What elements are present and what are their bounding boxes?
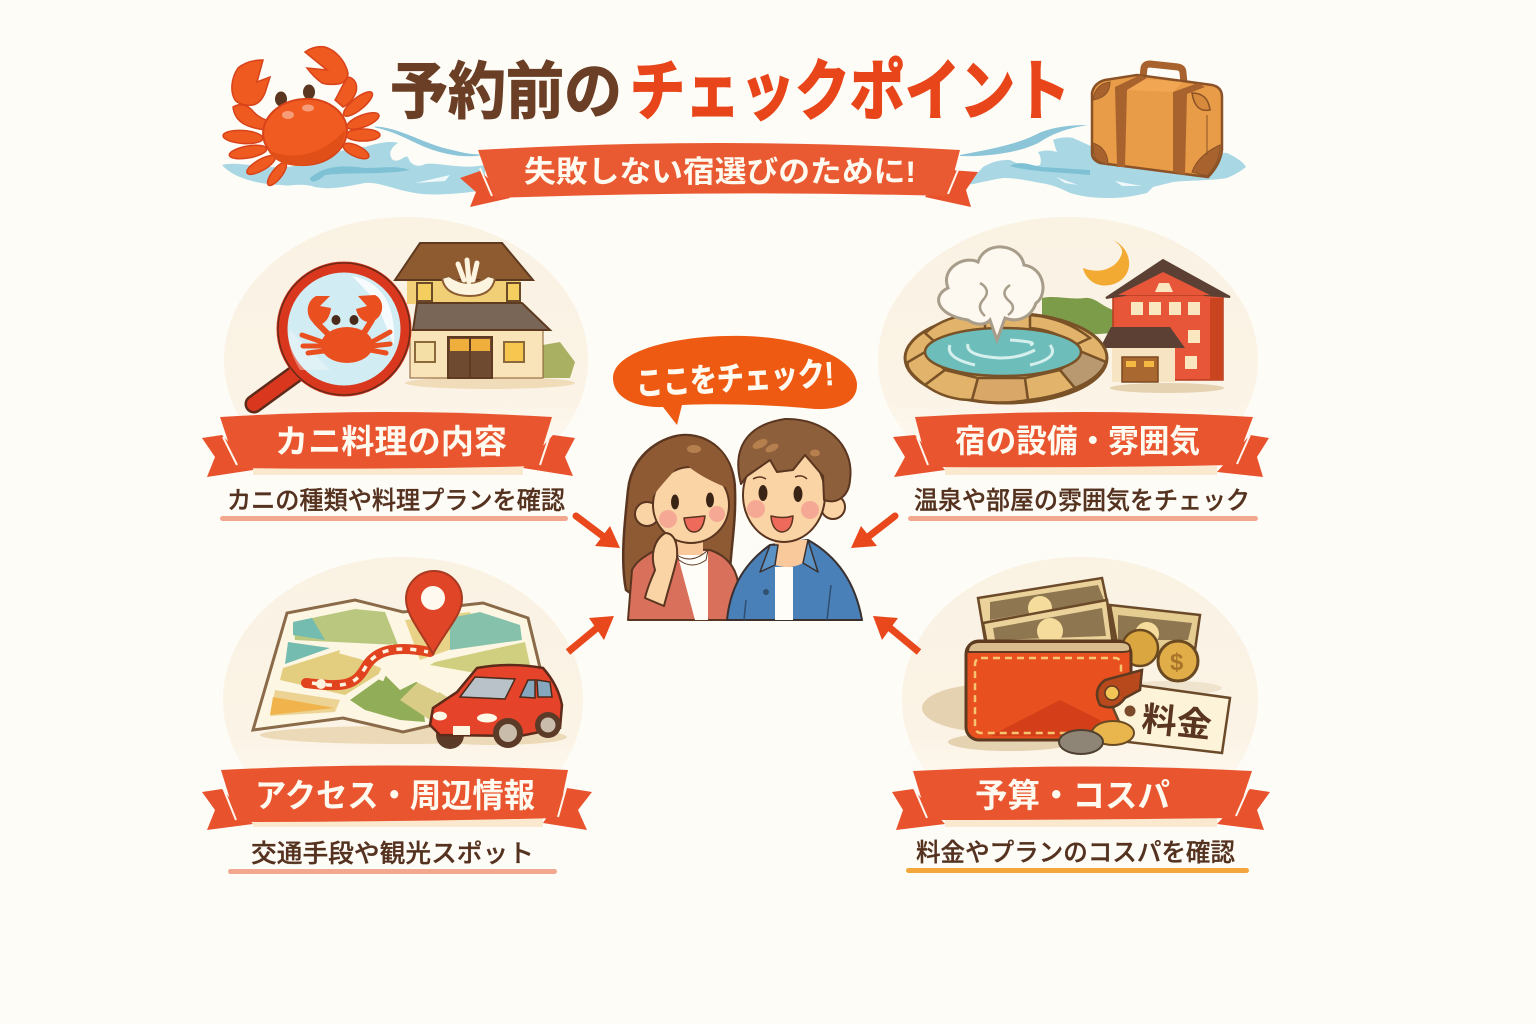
arrow: bottom right to couple	[873, 616, 919, 652]
panel: access and surroundings	[202, 557, 592, 874]
icon: wallet with money	[922, 578, 1230, 754]
icon: suitcase	[1092, 64, 1222, 177]
caption: access and surroundings: 交通手段や観光スポット	[251, 840, 534, 868]
subtitle ribbon: 失敗しない宿選びのために!	[524, 156, 916, 189]
illustration: couple	[623, 419, 862, 620]
subtitle ribbon	[460, 143, 978, 207]
caption: facilities and atmosphere: 温泉や部屋の雰囲気をチェック	[914, 487, 1250, 515]
icon: map with route and pin	[253, 571, 543, 744]
ribbon: budget and value	[892, 766, 1270, 830]
figure: woman	[623, 435, 738, 620]
icon: wallet with money: 料金	[1140, 700, 1213, 746]
ribbon: crab cuisine: カニ料理の内容	[275, 423, 507, 460]
title: 予約前の	[390, 58, 622, 127]
arrow: top right to couple	[851, 516, 895, 548]
ribbon: facilities and atmosphere: 宿の設備・雰囲気	[955, 423, 1200, 459]
icon: large crab	[223, 47, 381, 188]
figure: man	[727, 419, 862, 620]
panel: facilities and atmosphere	[878, 217, 1269, 521]
icon: red inn with moon	[1042, 240, 1230, 393]
header: waves behind banner	[222, 125, 1246, 198]
ribbon: facilities and atmosphere	[893, 412, 1269, 477]
ribbon: access and surroundings	[202, 766, 592, 830]
icon: red car	[423, 665, 567, 749]
speech bubble: ここをチェック!	[635, 355, 835, 402]
title	[390, 54, 1070, 128]
arrow: top left to couple	[576, 516, 620, 548]
icon: hot spring pool with steam	[905, 247, 1107, 403]
arrow: bottom left to couple	[568, 616, 614, 652]
ribbon: access and surroundings: アクセス・周辺情報	[255, 777, 535, 814]
title: チェックポイント	[630, 54, 1070, 128]
icon: inn building	[395, 243, 575, 389]
caption: budget and value: 料金やプランのコスパを確認	[916, 839, 1235, 867]
speech bubble	[613, 336, 857, 425]
ribbon: crab cuisine	[202, 412, 575, 477]
caption: crab cuisine: カニの種類や料理プランを確認	[227, 487, 565, 515]
icon: wallet with money: $	[1170, 649, 1184, 676]
caption: access and surroundings	[228, 840, 557, 874]
ribbon: budget and value: 予算・コスパ	[975, 777, 1170, 814]
panel: crab cuisine	[202, 217, 588, 521]
icon: magnifying glass with crab	[254, 263, 410, 404]
panel: budget and value	[892, 557, 1270, 873]
